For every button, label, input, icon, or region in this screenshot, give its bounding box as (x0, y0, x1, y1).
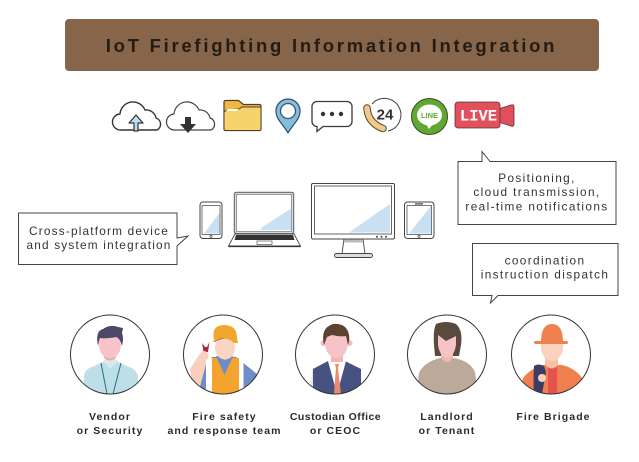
persona: custodian office (296, 315, 374, 394)
callout: cross-platform: and system integration (26, 238, 172, 252)
device: smartphone (200, 202, 222, 238)
persona: fire brigade (512, 315, 590, 394)
device: laptop (228, 192, 300, 246)
callout: positioning (458, 152, 616, 224)
label: vendor or security (77, 411, 143, 437)
callout: coordination: coordination (505, 254, 585, 268)
label: landlord or tenant (419, 411, 475, 437)
icon: LINE app (412, 98, 448, 134)
icon: cloud upload (112, 102, 161, 131)
label: vendor or security: or Security (77, 425, 143, 437)
label: fire safety team: and response team (167, 425, 282, 437)
icon: LIVE camera: LIVE (460, 108, 497, 126)
persona: fire safety team (184, 315, 262, 394)
icon: location pin (276, 99, 300, 133)
callout: cross-platform: Cross-platform device (29, 224, 169, 238)
icon: folder (224, 100, 261, 130)
label: landlord or tenant: Landlord (420, 411, 474, 423)
callout: cross-platform (18, 213, 188, 264)
device: desktop monitor (312, 184, 394, 258)
label: fire brigade: Fire Brigade (516, 411, 591, 423)
callout: coordination: instruction dispatch (481, 268, 609, 282)
icon: chat bubble (312, 102, 352, 132)
device: tablet (404, 202, 434, 238)
label: landlord or tenant: or Tenant (419, 425, 475, 437)
icon: LINE app: LINE (421, 111, 438, 120)
label: custodian office: Custodian Office (290, 411, 381, 423)
callout: positioning: Positioning, (498, 171, 576, 185)
icon: 24 hour phone: 24 (377, 106, 394, 124)
icon: LIVE camera (455, 102, 514, 128)
title banner (65, 19, 599, 71)
label: custodian office: or CEOC (310, 425, 361, 437)
persona: landlord or tenant (408, 315, 486, 394)
icon: 24 hour phone (367, 98, 401, 131)
label: custodian office (290, 411, 381, 437)
label: fire safety team: Fire safety (192, 411, 257, 423)
callout: positioning: cloud transmission, (473, 185, 601, 199)
title banner: IoT Firefighting Information Integration (106, 35, 557, 56)
callout: coordination (472, 244, 618, 303)
label: vendor or security: Vendor (89, 411, 131, 423)
callout: positioning: real-time notifications (465, 200, 609, 214)
label: fire safety team (167, 411, 282, 437)
persona: vendor or security (70, 315, 150, 394)
icon: cloud download (166, 102, 215, 133)
